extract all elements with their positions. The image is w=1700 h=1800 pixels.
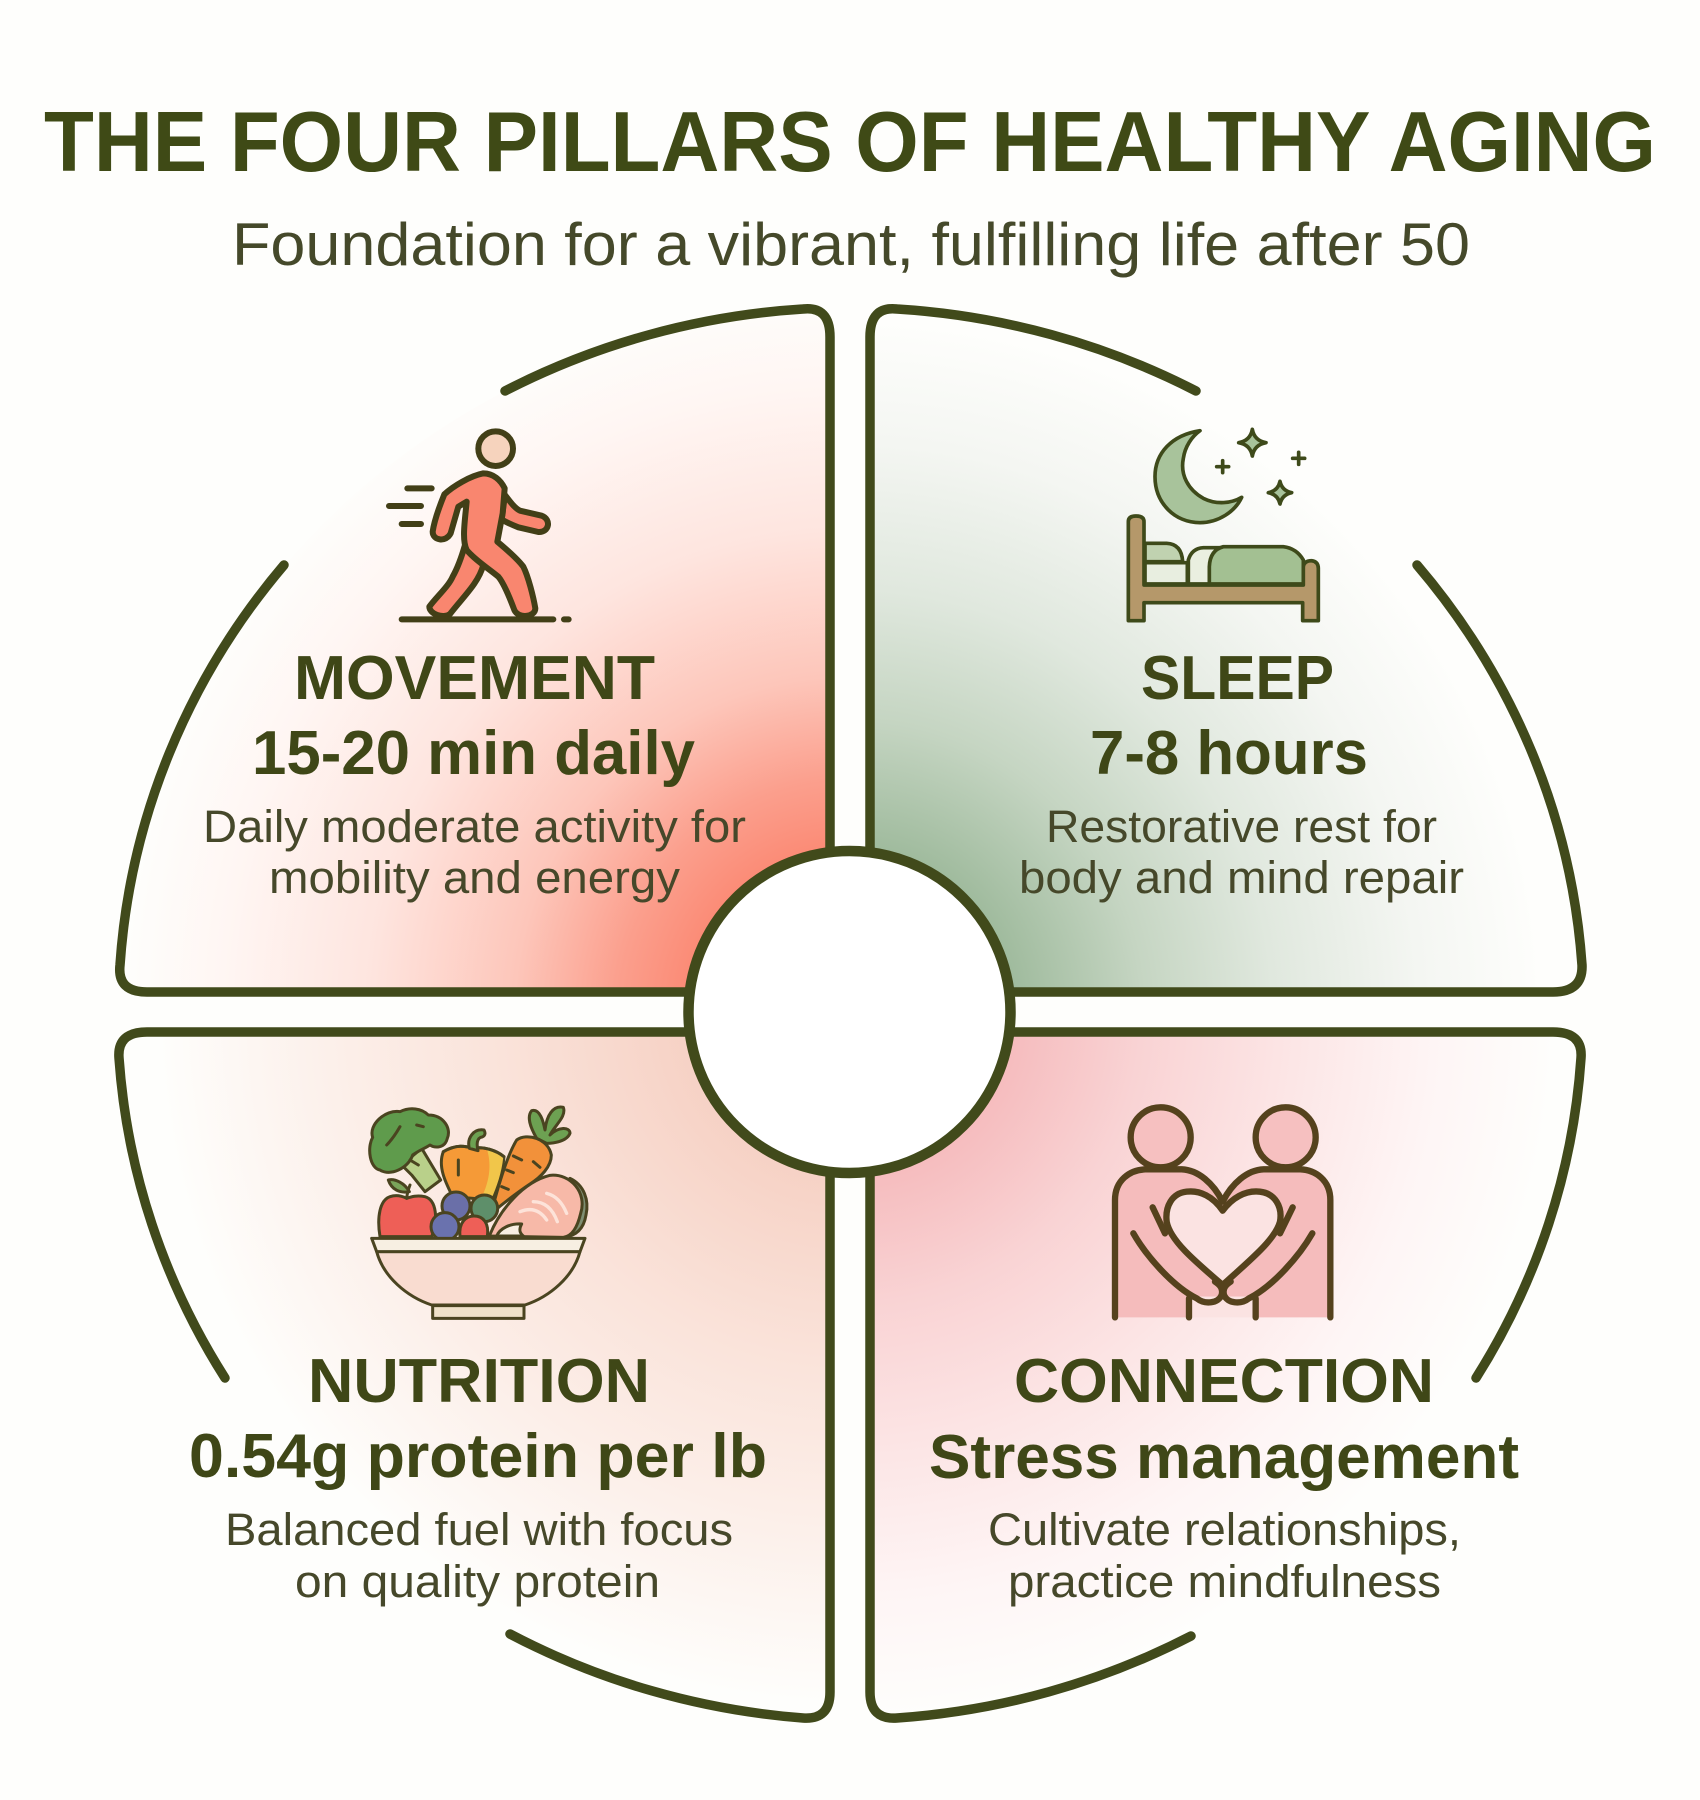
subtitle: Foundation for a vibrant, fulfilling life after 50 bbox=[232, 211, 1470, 278]
connection description: practice mindfulness bbox=[1008, 1556, 1441, 1607]
nutrition heading: NUTRITION bbox=[308, 1347, 650, 1416]
movement description: Daily moderate activity for bbox=[203, 801, 746, 852]
connection description bbox=[988, 1504, 1461, 1607]
nutrition panel fill bbox=[119, 1032, 830, 1718]
icon: walking person bbox=[389, 431, 569, 619]
sleep description bbox=[1019, 801, 1464, 903]
nutrition description: on quality protein bbox=[295, 1556, 660, 1607]
sleep heading: SLEEP bbox=[1141, 644, 1334, 713]
connection panel outline bbox=[870, 1032, 1581, 1718]
panel: sleep bbox=[870, 309, 1582, 992]
movement panel outline bbox=[120, 309, 830, 992]
connection panel fill bbox=[870, 1032, 1581, 1718]
sleep description: Restorative rest for bbox=[1046, 801, 1437, 852]
connection heading: CONNECTION bbox=[1014, 1347, 1434, 1416]
icon: two people forming a heart bbox=[1115, 1107, 1330, 1317]
icon: bowl of healthy food bbox=[370, 1107, 587, 1318]
connection target: Stress management bbox=[929, 1423, 1519, 1492]
nutrition description: Balanced fuel with focus bbox=[225, 1504, 733, 1555]
sleep target: 7-8 hours bbox=[1090, 719, 1368, 788]
movement target: 15-20 min daily bbox=[252, 719, 696, 788]
nutrition description bbox=[225, 1504, 733, 1607]
connection description: Cultivate relationships, bbox=[988, 1504, 1461, 1555]
sleep description: body and mind repair bbox=[1019, 852, 1464, 903]
panel: movement bbox=[120, 309, 830, 992]
title: THE FOUR PILLARS OF HEALTHY AGING bbox=[44, 95, 1656, 190]
icon: moon and bed bbox=[1128, 429, 1318, 621]
center circle bbox=[688, 851, 1010, 1173]
panel: connection bbox=[870, 1032, 1581, 1718]
nutrition target: 0.54g protein per lb bbox=[189, 1422, 767, 1491]
movement description: mobility and energy bbox=[269, 852, 681, 903]
movement panel fill bbox=[120, 309, 830, 992]
movement description bbox=[203, 801, 746, 903]
sleep panel outline bbox=[870, 309, 1582, 992]
sleep panel fill bbox=[870, 309, 1582, 992]
movement heading: MOVEMENT bbox=[294, 644, 655, 713]
nutrition panel outline bbox=[119, 1032, 830, 1718]
panel: nutrition bbox=[119, 1032, 830, 1718]
